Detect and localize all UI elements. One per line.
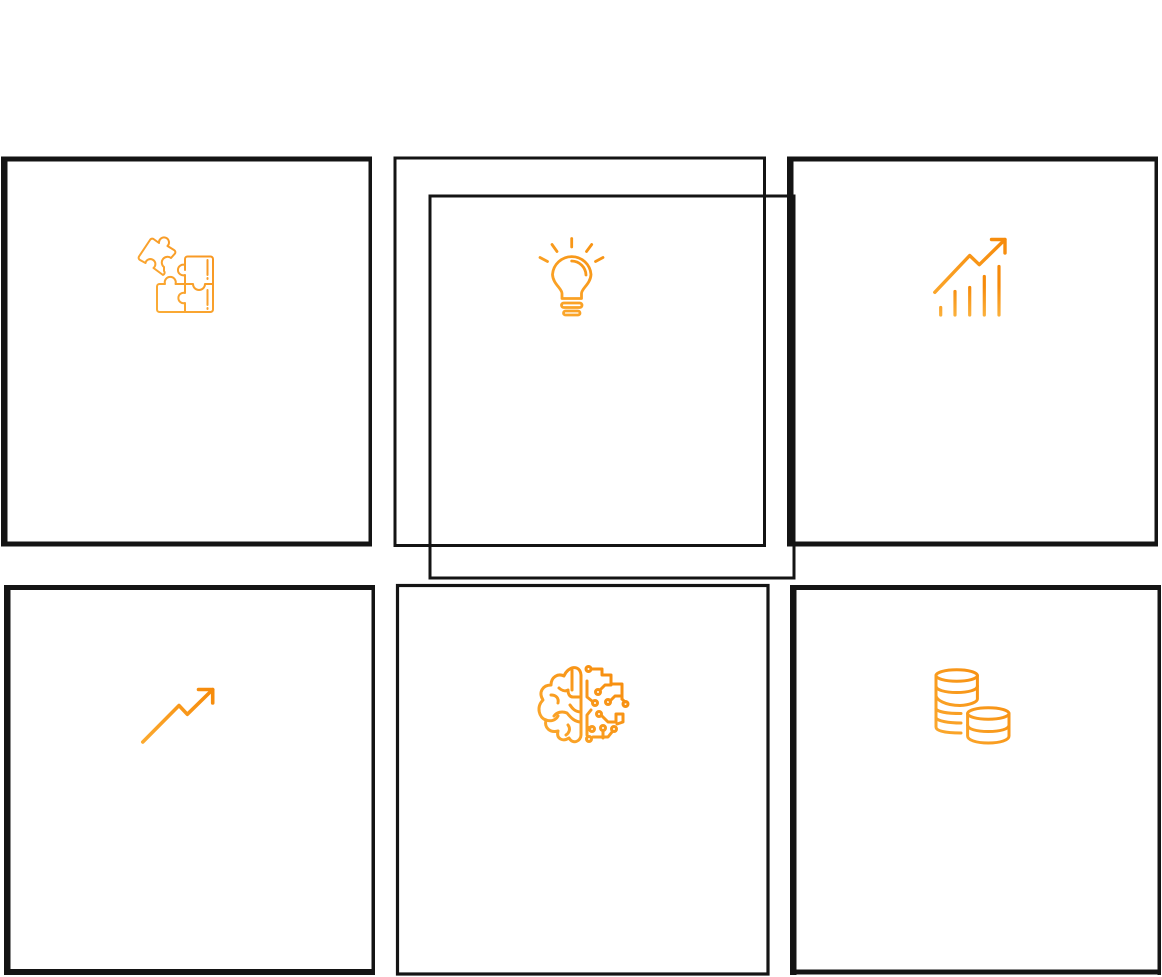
panel: bottom middle frame [398, 586, 768, 974]
panel: offset overlay frame [430, 196, 794, 578]
icon: brain with circuits [539, 666, 628, 742]
icon: light bulb [540, 238, 603, 315]
icon: puzzle pieces [139, 237, 213, 312]
icon: coin stacks [936, 670, 1009, 743]
panel: top left frame [1, 156, 372, 546]
panel: bottom right frame [790, 585, 1161, 975]
icon: rising arrow [143, 690, 213, 742]
panel: top right frame [787, 156, 1158, 546]
icon: growth chart with bars [935, 240, 1005, 315]
panel: bottom left frame [4, 585, 375, 975]
panel: top middle frame [395, 158, 764, 546]
